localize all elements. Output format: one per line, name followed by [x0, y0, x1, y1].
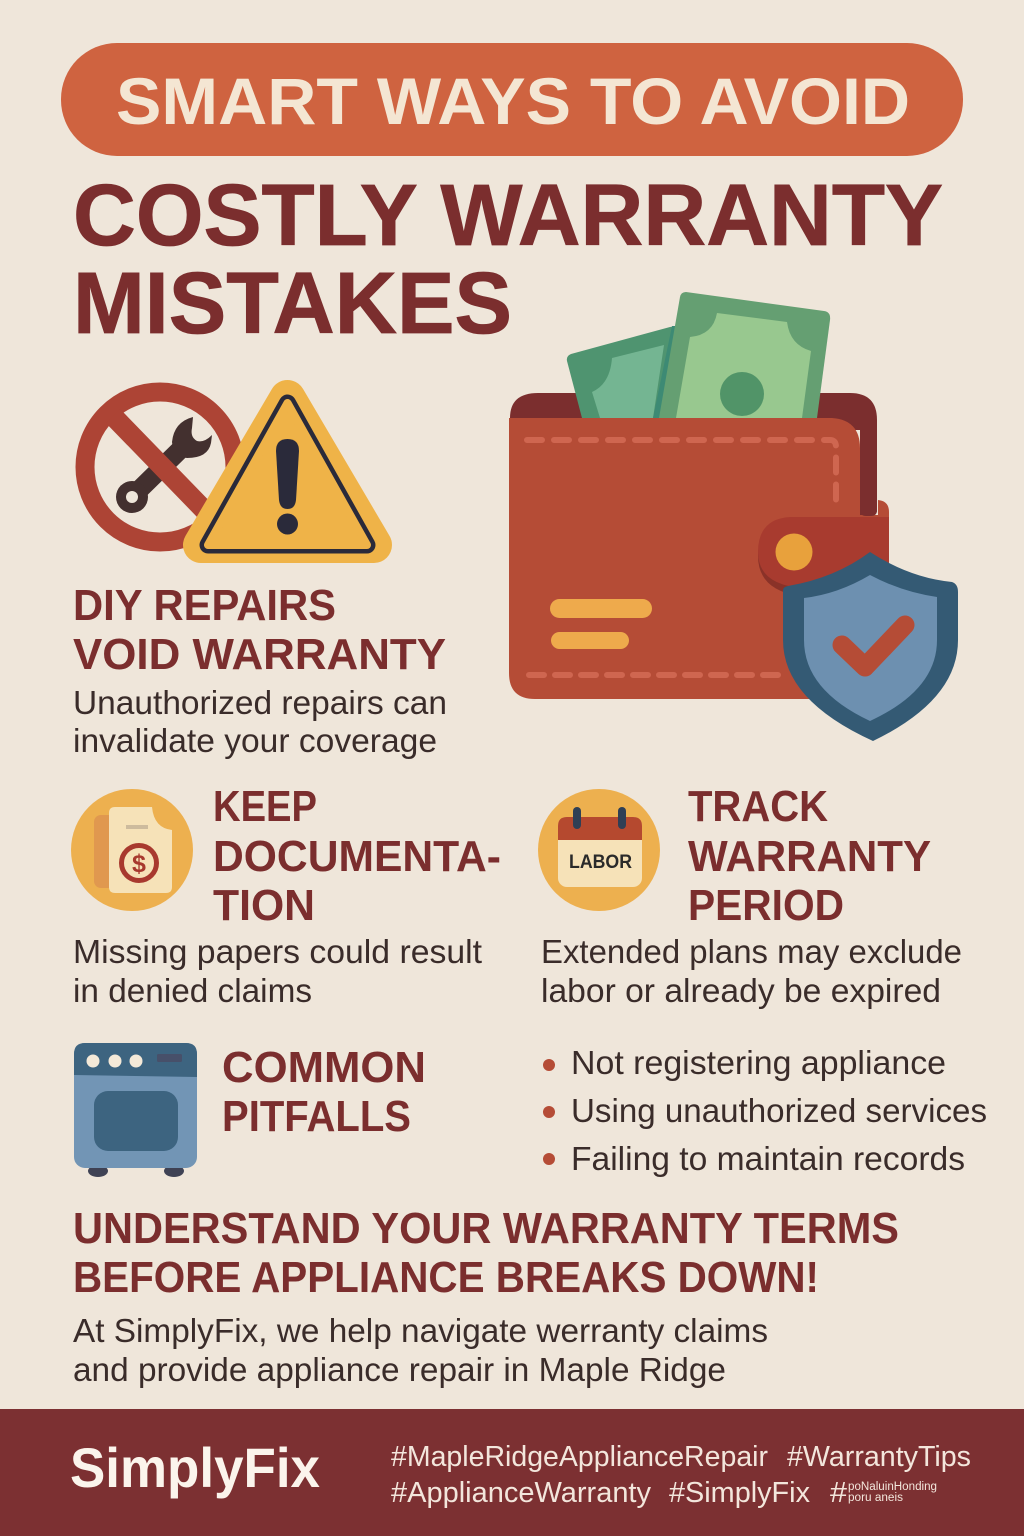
- bullet list: pitfalls: [543, 1044, 987, 1177]
- section: common pitfalls heading: PITFALLS: [222, 1092, 411, 1141]
- card lines: [550, 599, 652, 618]
- back banknote: [567, 327, 675, 418]
- section: DIY repairs: DIY REPAIRS: [73, 581, 336, 630]
- icon: labor calendar: LABOR: [569, 852, 632, 873]
- wallet back strip: [860, 430, 877, 516]
- footer bar: [0, 1409, 1024, 1536]
- footer hashtags: #: [830, 1477, 847, 1509]
- icon: labor calendar: [538, 789, 660, 911]
- icon: wallet with cash and shield: [509, 292, 958, 741]
- footer hashtags: poNaluinHonding: [848, 1481, 937, 1493]
- bullet list: pitfalls: Using unauthorized services: [571, 1092, 987, 1129]
- section: track warranty period: TRACK: [688, 782, 828, 831]
- footer hashtags: #MapleRidgeApplianceRepair: [391, 1441, 768, 1473]
- wallet back: [510, 393, 877, 516]
- title banner: SMART WAYS TO AVOID: [116, 64, 910, 138]
- section: track warranty period: WARRANTY: [688, 832, 931, 881]
- section: common pitfalls heading: COMMON: [222, 1043, 426, 1092]
- section: track warranty period: labor or already be expired: [541, 972, 941, 1009]
- icon: document with dollar: $: [132, 850, 146, 878]
- footer hashtags: [391, 1441, 971, 1509]
- section: track warranty period: Extended plans may exclude: [541, 933, 962, 970]
- call to action heading: UNDERSTAND YOUR WARRANTY TERMS: [73, 1204, 899, 1253]
- wrench: [116, 417, 212, 513]
- call to action heading: [73, 1204, 899, 1302]
- shield: [783, 552, 958, 741]
- icon: oven appliance: [74, 1043, 197, 1177]
- footer hashtags: #ApplianceWarranty: [391, 1477, 651, 1509]
- call to action text: At SimplyFix, we help navigate werranty claims: [73, 1312, 768, 1349]
- footer hashtags: #SimplyFix: [669, 1477, 810, 1509]
- warning triangle: [201, 398, 374, 545]
- main heading: COSTLY WARRANTY: [73, 167, 943, 264]
- call to action heading: BEFORE APPLIANCE BREAKS DOWN!: [73, 1253, 819, 1302]
- section: DIY repairs: invalidate your coverage: [73, 722, 437, 759]
- call to action text: [73, 1312, 768, 1388]
- section: keep documentation: DOCUMENTA-: [213, 832, 501, 881]
- prohibition sign: [85, 392, 235, 542]
- stitching: [527, 440, 836, 507]
- title banner: [61, 43, 963, 156]
- section: DIY repairs: VOID WARRANTY: [73, 630, 446, 679]
- section: keep documentation: Missing papers could result: [73, 933, 482, 970]
- section: keep documentation: TION: [213, 881, 315, 930]
- section: DIY repairs: Unauthorized repairs can: [73, 684, 447, 721]
- section: track warranty period: PERIOD: [688, 881, 844, 930]
- wallet body: [509, 418, 889, 699]
- section: keep documentation: in denied claims: [73, 972, 312, 1009]
- section: track warranty period: [541, 782, 962, 1009]
- icon: document with dollar: [71, 789, 193, 911]
- footer brand: SimplyFix: [70, 1436, 320, 1499]
- main heading: [73, 167, 943, 352]
- section: keep documentation: [73, 782, 501, 1009]
- bullet list: pitfalls: Not registering appliance: [571, 1044, 946, 1081]
- front banknote: [653, 292, 830, 418]
- clasp: [758, 524, 889, 596]
- footer hashtags: #WarrantyTips: [787, 1441, 971, 1473]
- call to action text: and provide appliance repair in Maple Ridge: [73, 1351, 726, 1388]
- footer hashtags: poru aneis: [848, 1492, 903, 1504]
- icon: no DIY wrench and warning triangle: [85, 392, 374, 545]
- section: keep documentation: KEEP: [213, 782, 317, 831]
- bullet list: pitfalls: Failing to maintain records: [571, 1140, 965, 1177]
- main heading: MISTAKES: [73, 255, 512, 352]
- section: DIY repairs: [73, 581, 447, 759]
- section: common pitfalls heading: [222, 1043, 426, 1141]
